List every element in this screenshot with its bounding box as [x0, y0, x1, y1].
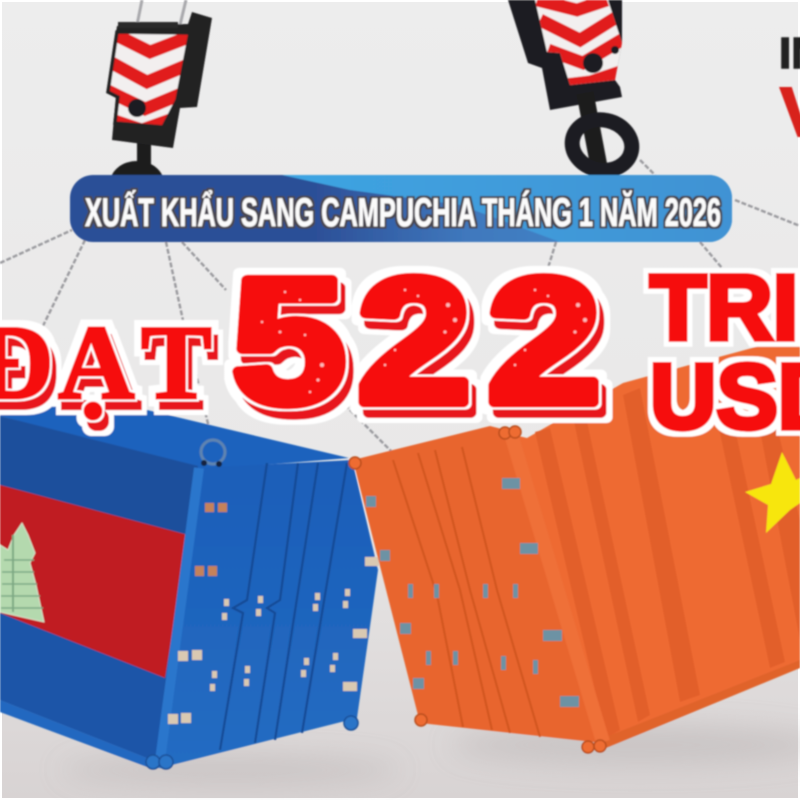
floor shadows	[60, 725, 800, 784]
speckle texture	[261, 289, 587, 393]
container side with Cambodian flag	[0, 416, 198, 768]
star	[745, 452, 800, 533]
publisher mark	[779, 29, 800, 151]
Angkor Wat emblem	[0, 523, 44, 622]
latches	[366, 478, 579, 707]
container top face	[0, 400, 349, 470]
unit: TRIỆU USD	[650, 256, 800, 448]
latches	[195, 503, 227, 576]
container door face	[159, 460, 379, 768]
container door face	[353, 426, 603, 743]
corner fittings	[146, 716, 358, 769]
lifting chains	[0, 160, 800, 452]
lifting ring	[201, 440, 225, 467]
crane hook: right	[508, 0, 637, 176]
container: Vietnam (orange)	[349, 335, 800, 753]
corner fittings	[349, 426, 606, 753]
headline banner	[70, 175, 732, 242]
container: Cambodia (blue)	[0, 400, 379, 769]
crane hook: left	[105, 11, 213, 176]
container side with Vietnamese flag	[510, 335, 800, 748]
key figure: 522: 522	[232, 242, 601, 440]
